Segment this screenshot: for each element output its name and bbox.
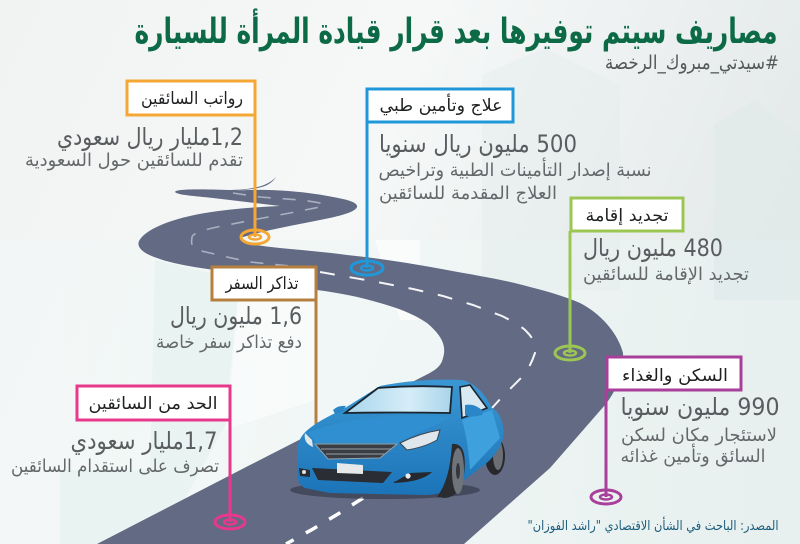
callout: medical insurance: 500 مليون ريال سنويا [379,130,577,158]
shadow [290,481,480,499]
callout: housing and food: السكن والغذاء [622,366,728,386]
callout: travel tickets: تذاكر السفر [225,274,299,294]
callout: medical insurance: نسبة إصدار التأمينات الطبية وتراخيص [378,157,652,181]
headlights [400,430,440,450]
callout: residency renewal: 480 مليون ريال [583,234,723,262]
side windows [460,385,487,418]
callout: medical insurance: علاج وتأمين طبي [380,93,502,116]
lower road dashes [320,272,535,408]
callout: medical insurance: العلاج المقدمة للسائقين [379,183,557,204]
callout: limiting drivers: 1,7مليار سعودي [70,427,218,455]
callout: limiting drivers [11,386,245,529]
callout: residency renewal: تجديد الإقامة للسائقين [583,264,749,285]
callout: travel tickets: 1,6 مليون ريال [170,302,302,330]
pin [555,346,585,360]
callout: limiting drivers: الحد من السائقين [88,394,218,414]
callout: limiting drivers: تصرف على استقدام السائقين [11,456,219,477]
callout: housing and food: 990 مليون سنويا [620,393,780,421]
callout: housing and food [591,357,780,504]
fog lights [405,473,411,479]
icon: blue car [290,380,505,499]
pin [591,490,621,504]
front wheel [437,444,465,498]
callout: medical insurance [351,89,652,275]
callout: residency renewal [555,198,749,360]
callout: driver salaries: رواتب السائقين [141,89,243,109]
callout: driver salaries: 1,2مليار ريال سعودي [57,123,243,151]
callout: housing and food: لاستئجار مكان لسكن [621,425,777,446]
car body [297,380,503,495]
pin [241,230,269,244]
rear wheel [485,437,505,475]
winding road [97,177,623,544]
lower bumper [312,468,392,483]
pin [215,515,245,529]
windshield [345,386,452,413]
front grille [315,444,397,459]
number plate [337,463,363,474]
hashtag: #سيدتي_مبروك_الرخصة [605,52,779,74]
pin [351,261,383,275]
callout: driver salaries: تقدم للسائقين حول السعودية [25,150,243,171]
callout: travel tickets [156,267,316,425]
callout: travel tickets: دفع تذاكر سفر خاصة [156,332,302,353]
callout: residency renewal: تجديد إقامة [586,206,669,226]
hood highlight [308,415,452,443]
upper road dashes [192,193,324,266]
callout: housing and food: السائق وتأمين غذائه [620,443,766,467]
mirrors [465,405,483,416]
callout: driver salaries [25,81,269,244]
door panel [462,410,500,470]
